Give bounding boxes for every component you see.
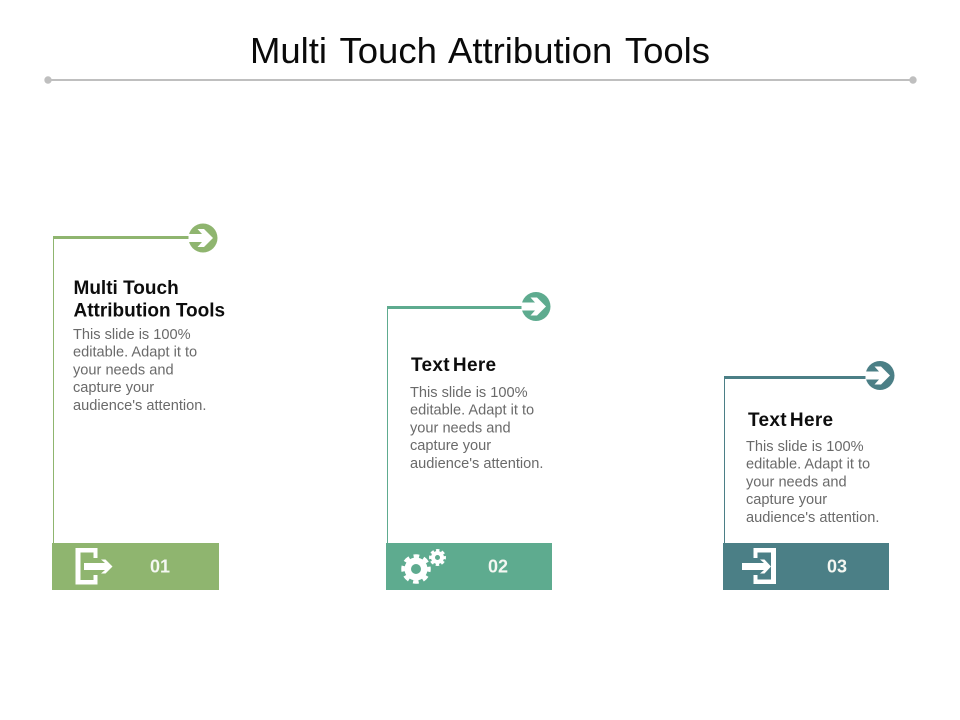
panel 1 body text: This slide is 100% xyxy=(73,327,191,343)
panel 3 number: 03 xyxy=(827,556,847,576)
panel 2 body text: editable. Adapt it to xyxy=(410,403,534,419)
panel 2 number: 02 xyxy=(488,556,508,576)
panel 2 frame line xyxy=(386,308,388,543)
panel 2 body text: audience's attention. xyxy=(410,456,543,472)
panel 3 body text: audience's attention. xyxy=(746,510,879,526)
panel: step 2 xyxy=(386,292,552,590)
panel 2 heading: Text Here xyxy=(411,355,496,376)
panel 1 number: 01 xyxy=(150,556,170,576)
panel 1 body text: your needs and xyxy=(73,362,174,378)
panel 2 footer bar xyxy=(386,543,552,590)
panel 3 body text: capture your xyxy=(746,492,827,508)
panel 1 body text: audience's attention. xyxy=(73,398,206,414)
panel 1 frame line xyxy=(52,238,54,543)
panel 1 footer bar xyxy=(52,543,219,590)
title divider xyxy=(44,76,917,84)
panel 3 frame line xyxy=(724,378,726,543)
panel: step 3 xyxy=(723,361,894,590)
icon: enter xyxy=(742,548,776,584)
panel 2 body text: your needs and xyxy=(410,420,511,436)
icon: arrow circle 1 xyxy=(188,224,218,252)
panel 1 heading: Attribution Tools xyxy=(74,300,225,322)
panel 1 top rule xyxy=(53,236,189,239)
panel 2 top rule xyxy=(387,306,522,309)
panel 1 body text: editable. Adapt it to xyxy=(73,345,197,361)
panel 3 top rule xyxy=(724,376,866,379)
panel 2 body text: capture your xyxy=(410,438,491,454)
panel 2 body text: This slide is 100% xyxy=(410,385,528,401)
panel 3 heading: Text Here xyxy=(748,410,833,431)
icon: gears xyxy=(403,550,445,582)
panel: step 1 xyxy=(52,224,225,590)
panel 1 heading: Multi Touch xyxy=(74,278,179,299)
panel 3 body text: your needs and xyxy=(746,474,847,490)
title: Multi Touch Attribution Tools xyxy=(250,30,710,71)
panel 3 body text: This slide is 100% xyxy=(746,439,864,455)
panel 1 body text: capture your xyxy=(73,380,154,396)
icon: arrow circle 2 xyxy=(522,292,550,321)
icon: exit xyxy=(76,548,112,584)
panel 3 footer bar xyxy=(723,543,889,590)
icon: arrow circle 3 xyxy=(866,361,894,390)
panel 3 body text: editable. Adapt it to xyxy=(746,457,870,473)
